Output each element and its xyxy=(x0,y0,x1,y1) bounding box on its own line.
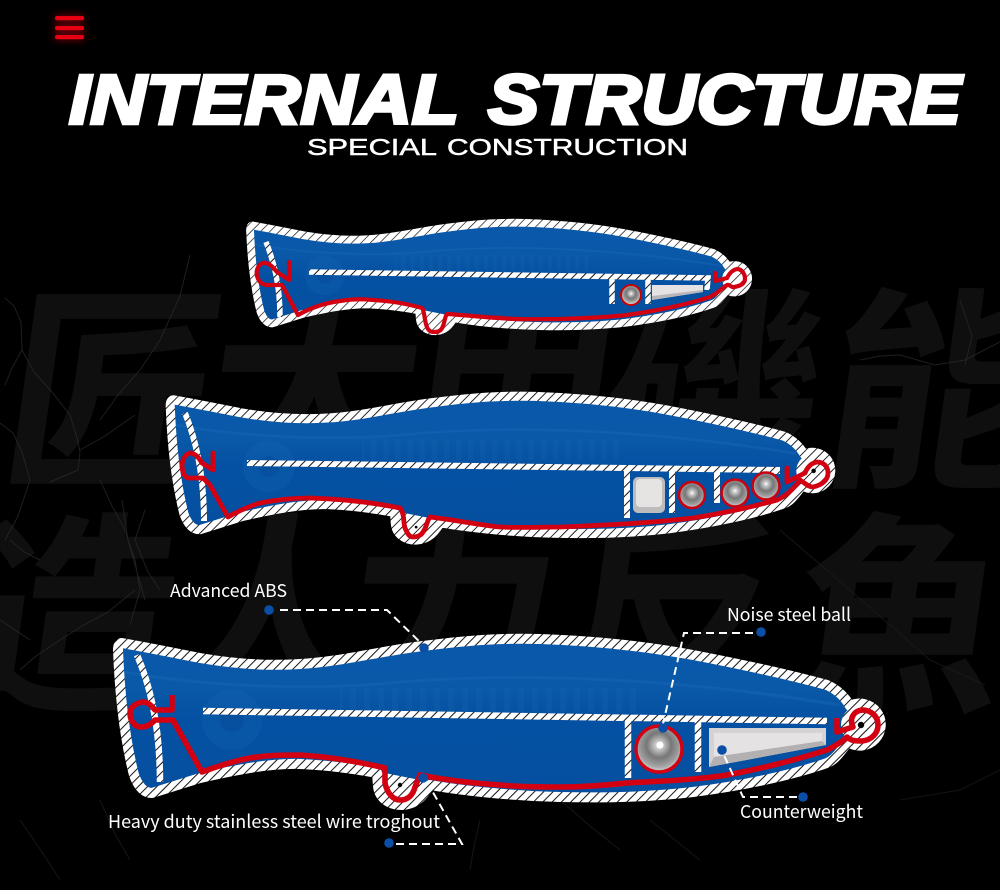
lure 1 body xyxy=(250,223,748,331)
background: faint calligraphic characters: 人 xyxy=(146,500,395,741)
icon: red menu xyxy=(55,16,84,39)
lure 3 noise steel ball xyxy=(636,726,682,772)
lure 1 steel ball xyxy=(620,284,642,306)
lure 2 body xyxy=(170,396,831,540)
lure 3 tail bar and spine xyxy=(137,655,827,782)
callout: stainless steel wire xyxy=(108,773,462,848)
background: faint calligraphic characters xyxy=(0,275,1000,741)
callout: stainless steel wire: Heavy duty stainless steel wire troghout xyxy=(108,808,440,834)
background: marble cracks xyxy=(0,255,1000,880)
lure 2: medium popper xyxy=(170,396,831,540)
background: faint calligraphic characters: 反 xyxy=(546,500,795,741)
background: faint calligraphic characters: 甲 xyxy=(390,275,638,516)
background: faint calligraphic characters: 力 xyxy=(326,500,575,741)
lure 1 counterweight xyxy=(652,285,703,300)
subtitle: SPECIAL xyxy=(307,134,437,160)
callout: Noise steel ball: Noise steel ball xyxy=(727,601,851,627)
lure 3: large popper xyxy=(118,639,881,805)
title xyxy=(69,60,964,138)
lure 1 wire xyxy=(257,262,745,332)
lure 3 wire xyxy=(130,695,878,800)
lure 2 tail bar and spine xyxy=(185,413,777,521)
callout: Noise steel ball xyxy=(658,601,851,733)
subtitle xyxy=(307,134,688,160)
lure 3 counterweight xyxy=(709,728,826,767)
background: faint calligraphic characters: 磯 xyxy=(590,275,838,516)
title: STRUCTURE xyxy=(488,60,964,138)
background: faint calligraphic characters: 大 xyxy=(190,275,438,516)
callout: Advanced ABS xyxy=(170,577,429,653)
callout: Counterweight: Counterweight xyxy=(740,798,863,824)
lure 2 square weight xyxy=(633,477,665,513)
subtitle: CONSTRUCTION xyxy=(447,134,688,160)
lure 1: small popper xyxy=(250,223,748,332)
title: INTERNAL xyxy=(69,60,459,138)
callout: Counterweight xyxy=(717,745,863,824)
callout: Advanced ABS: Advanced ABS xyxy=(170,577,287,603)
lure 2 steel balls xyxy=(679,472,780,508)
lure 3 body xyxy=(118,639,881,805)
lure 2 wire xyxy=(182,453,828,537)
lure 1 tail bar and spine xyxy=(266,242,708,317)
